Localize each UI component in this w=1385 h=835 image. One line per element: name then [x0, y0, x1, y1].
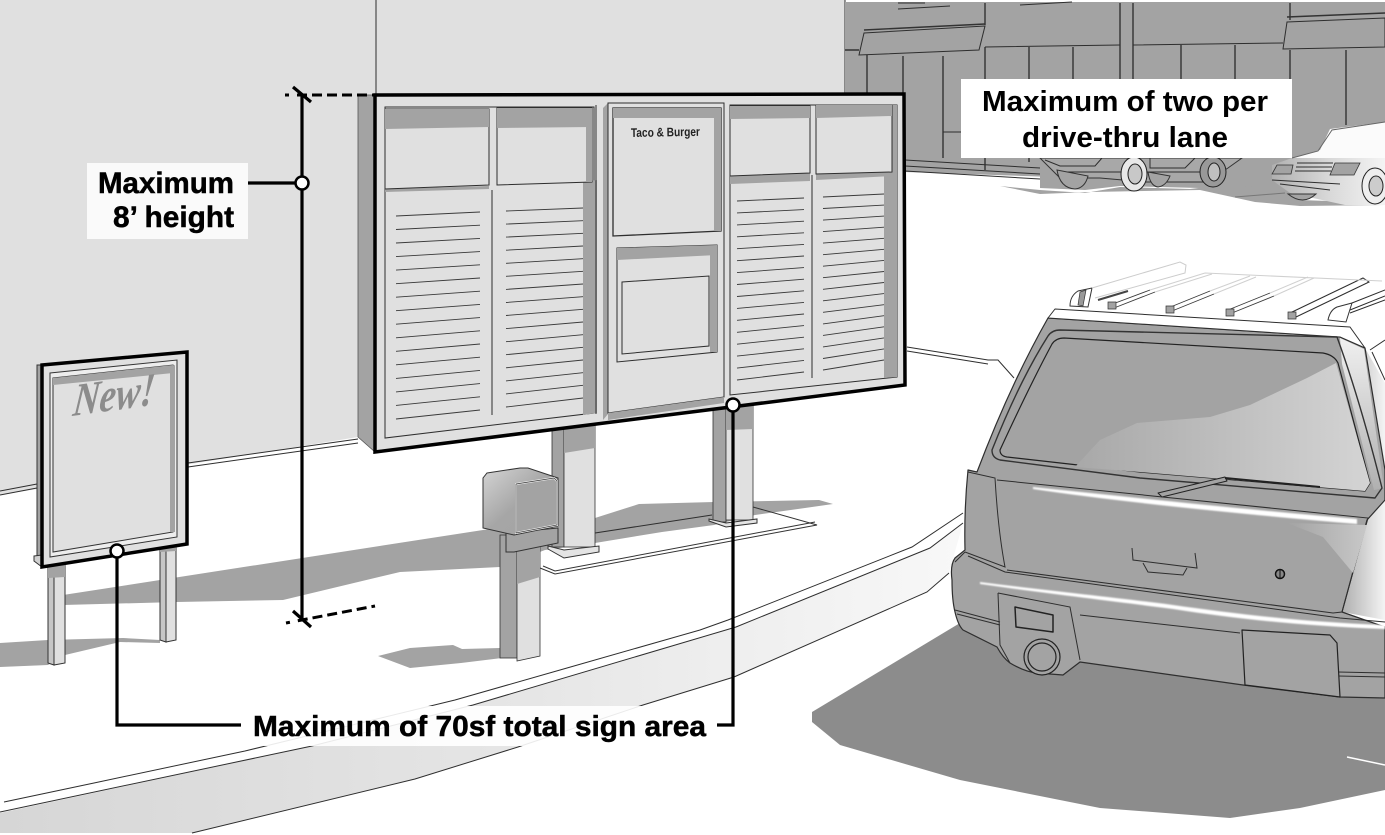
license plate recess — [998, 593, 1080, 663]
spoiler highlight — [1048, 309, 1365, 348]
left menu panel — [385, 105, 597, 438]
right panel header two — [816, 105, 892, 174]
right menu panel — [730, 105, 897, 395]
brand name: Taco & Burger — [631, 125, 700, 140]
small sign face — [42, 352, 187, 567]
bumper insert panel — [1242, 630, 1340, 697]
sign side face — [358, 95, 375, 452]
left awning — [859, 24, 985, 55]
kiosk screen — [516, 478, 557, 533]
sign area label: Maximum of 70sf total sign area — [253, 711, 707, 743]
curb segment beside main sign — [907, 347, 1014, 378]
sign area connector line — [110, 398, 740, 725]
bumper — [955, 552, 1385, 677]
background cars in parking lot — [1000, 122, 1385, 206]
background building — [845, 2, 1385, 188]
sign face — [375, 94, 905, 452]
right support post — [709, 400, 757, 527]
car roof and roof rack — [1055, 262, 1385, 360]
kiosk box — [483, 468, 558, 535]
window reflection — [1075, 363, 1370, 491]
car shadow on ground — [1000, 183, 1385, 206]
parked car two — [1272, 122, 1385, 205]
main menu board sign — [358, 94, 905, 452]
center menu panel — [603, 103, 724, 420]
door handle — [1132, 548, 1197, 575]
parked car one — [1040, 157, 1242, 191]
right awning — [1283, 13, 1385, 49]
curb and drive-thru lane edge — [0, 513, 963, 833]
height dimension line — [285, 87, 375, 627]
license plate — [1015, 607, 1053, 632]
shadow of order kiosk — [378, 645, 502, 668]
right window frame highlight — [1340, 338, 1384, 490]
menu lines column three — [737, 198, 804, 380]
height label: 8’ height — [113, 201, 234, 234]
menu lines column four — [823, 194, 884, 370]
restaurant wall — [0, 0, 845, 495]
exhaust pipe — [1024, 639, 1060, 675]
menu lines column two — [506, 208, 583, 407]
hatch lid — [997, 480, 1368, 613]
small sign posts — [48, 545, 176, 665]
quantity label: Maximum of two per — [982, 86, 1268, 118]
height callout leader — [248, 176, 308, 190]
height label: Maximum — [98, 167, 234, 200]
key lock — [1276, 570, 1284, 578]
rear window frame — [992, 330, 1382, 498]
tail light — [965, 472, 1005, 567]
rear wiper — [1158, 477, 1320, 497]
small sign base plank — [34, 537, 188, 567]
foreground car — [951, 262, 1385, 698]
car body — [951, 318, 1385, 698]
height label — [87, 163, 248, 239]
left support post — [548, 425, 599, 558]
sign area label background — [240, 706, 720, 746]
concrete pad under main sign — [540, 507, 817, 574]
right panel header one — [730, 106, 810, 176]
sign outline — [375, 94, 905, 452]
shadow of foreground car — [812, 620, 1385, 818]
upper display window — [613, 108, 721, 236]
kiosk pedestal — [500, 535, 540, 661]
lower display window — [617, 245, 717, 362]
left panel header one — [385, 109, 489, 189]
quantity label: drive-thru lane — [1022, 122, 1228, 154]
quantity label — [961, 79, 1292, 158]
ground shadows — [0, 500, 1385, 818]
shadow of signs and posts — [63, 500, 833, 605]
small sign side face — [37, 365, 42, 567]
small sign headline: New! — [70, 363, 158, 427]
rear window glass — [1000, 338, 1370, 491]
left panel header two — [497, 108, 592, 185]
car side panel to the right — [1335, 330, 1385, 620]
shadow of small sign — [0, 638, 160, 667]
menu lines column one — [396, 212, 480, 419]
main sign support posts — [548, 400, 757, 558]
small promotional sign — [34, 352, 188, 665]
order kiosk — [483, 468, 558, 661]
